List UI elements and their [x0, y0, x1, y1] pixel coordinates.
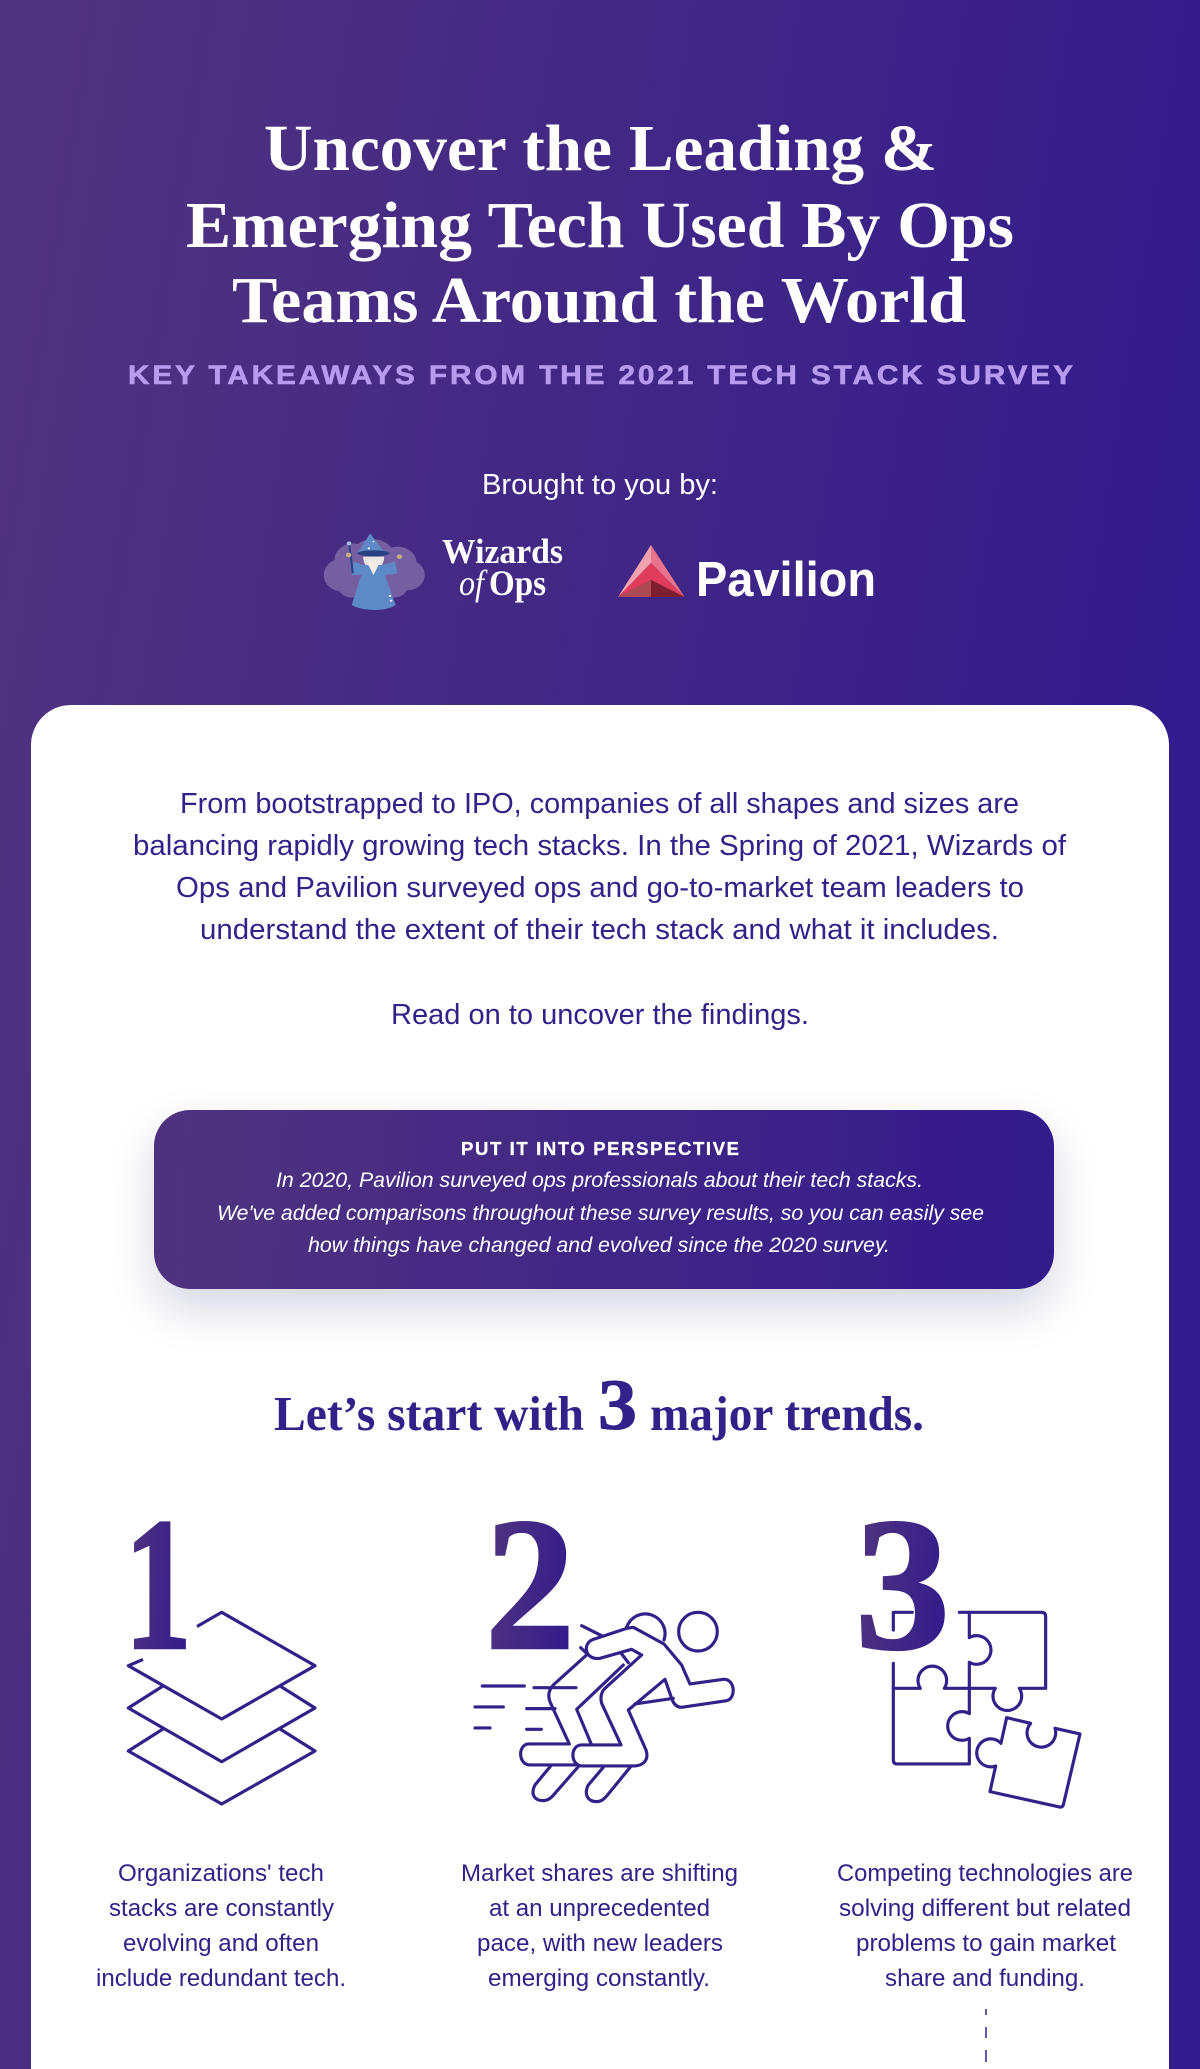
trend 1 — [96, 1480, 346, 1992]
heading: three major trends: 3 — [598, 1365, 637, 1445]
trend 2 text: emerging constantly. — [488, 1965, 710, 1992]
brought to you by: Brought to you by: — [482, 469, 718, 501]
number 2: 2 — [485, 1480, 575, 1690]
trend 3 — [837, 1480, 1133, 1992]
title — [186, 112, 1014, 337]
wordmark — [442, 532, 563, 603]
heading: three major trends: Let’s start with — [274, 1386, 584, 1441]
trend 1 text: stacks are constantly — [109, 1895, 334, 1922]
wordmark: Wizards — [442, 532, 563, 571]
logo: Wizards of Ops — [324, 532, 563, 610]
intro text: balancing rapidly growing tech stacks. In the Spring of 2021, Wizards of — [133, 830, 1067, 862]
callout text — [217, 1169, 984, 1257]
icon: wizard — [324, 533, 425, 610]
trend 2 text: at an unprecedented — [489, 1895, 710, 1922]
icon: pavilion triangle — [618, 545, 685, 597]
logo: Pavilion — [618, 545, 876, 607]
icon: stacked layers — [128, 1612, 315, 1804]
wordmark: of — [459, 563, 488, 603]
callout box — [154, 1110, 1054, 1289]
trend 2 text — [461, 1860, 738, 1992]
title: Emerging Tech Used By Ops — [186, 189, 1014, 262]
trend 1 text: evolving and often — [123, 1930, 319, 1957]
panel: white card — [31, 705, 1169, 2069]
wordmark: Pavilion — [696, 553, 876, 607]
intro text: From bootstrapped to IPO, companies of all shapes and sizes are — [180, 788, 1019, 820]
callout text: how things have changed and evolved since the 2020 survey. — [308, 1234, 890, 1257]
subtitle: KEY TAKEAWAYS FROM THE 2021 TECH STACK SURVEY — [128, 360, 1073, 391]
callout heading: PUT IT INTO PERSPECTIVE — [461, 1138, 739, 1159]
trend 3 text: solving different but related — [839, 1895, 1131, 1922]
connector: dashed line — [985, 2009, 987, 2062]
trend 3 text: share and funding. — [885, 1965, 1085, 1992]
intro text: Read on to uncover the findings. — [391, 999, 809, 1031]
trend 2 text: pace, with new leaders — [477, 1930, 723, 1957]
number 1: 1 — [124, 1480, 192, 1690]
icon: running figures — [475, 1612, 733, 1802]
number 3: 3 — [855, 1480, 950, 1690]
wordmark: Ops — [489, 563, 546, 603]
callout text: We've added comparisons throughout these survey results, so you can easily see — [217, 1202, 984, 1225]
trend 2 text: Market shares are shifting — [461, 1860, 738, 1887]
trend 3 text — [837, 1860, 1133, 1992]
intro text: understand the extent of their tech stack and what it includes. — [200, 914, 999, 946]
trend 1 text: include redundant tech. — [96, 1965, 346, 1992]
trend 3 text: problems to gain market — [856, 1930, 1116, 1957]
trend 1 text: Organizations' tech — [118, 1860, 324, 1887]
callout text: In 2020, Pavilion surveyed ops professionals about their tech stacks. — [276, 1169, 923, 1192]
title: Teams Around the World — [232, 264, 966, 337]
title: Uncover the Leading & — [264, 112, 937, 185]
trend 3 text: Competing technologies are — [837, 1860, 1133, 1887]
trend 1 text — [96, 1860, 346, 1992]
trend 2 — [461, 1480, 738, 1992]
intro text: Ops and Pavilion surveyed ops and go-to-market team leaders to — [176, 872, 1024, 904]
heading: three major trends — [274, 1365, 924, 1445]
icon: puzzle pieces — [893, 1612, 1080, 1807]
intro text — [133, 788, 1067, 1031]
heading: three major trends: major trends. — [650, 1386, 924, 1441]
callout: put it into perspective — [154, 1110, 1054, 1289]
